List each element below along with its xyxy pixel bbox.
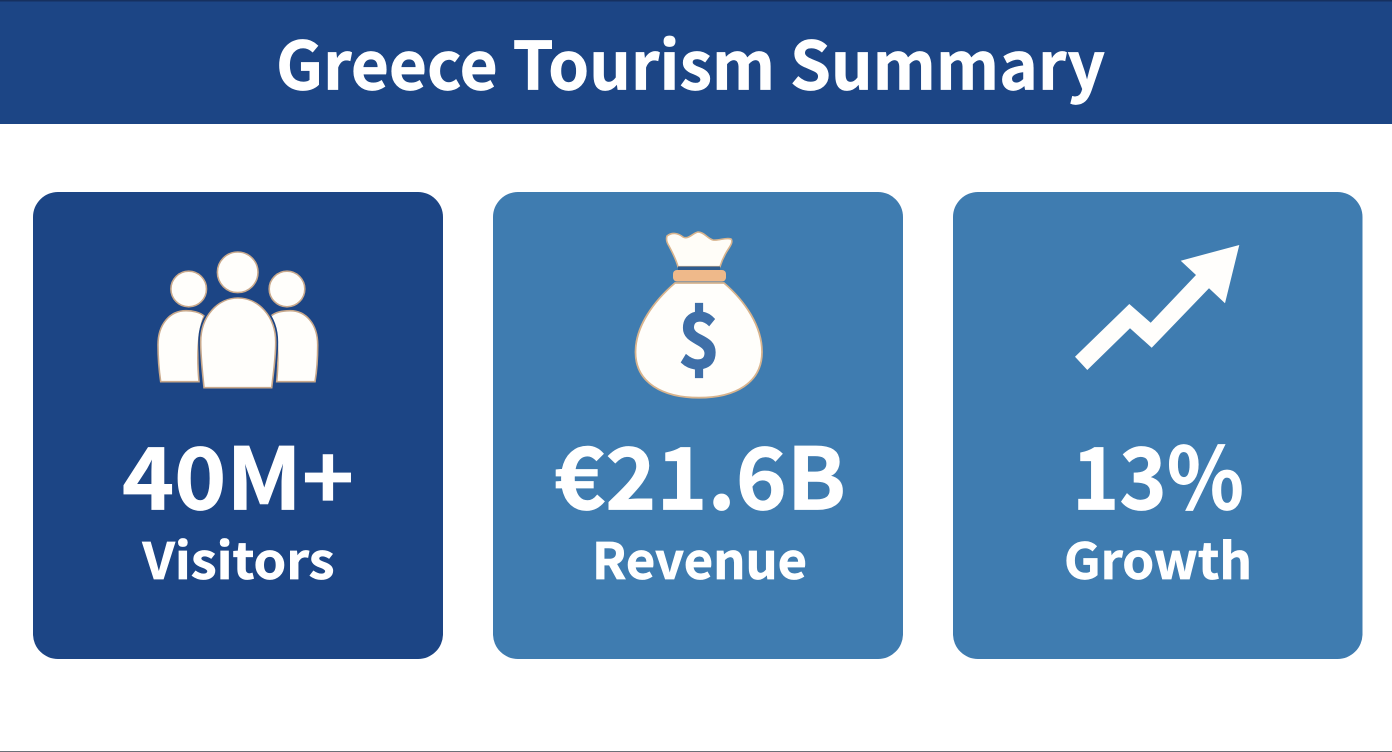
value: €21.6B: €21.6B bbox=[554, 410, 846, 534]
panel: growth bbox=[953, 192, 1362, 659]
label: Growth: Growth bbox=[1064, 522, 1252, 594]
panel: visitors bbox=[33, 192, 443, 659]
label: Revenue: Revenue bbox=[592, 522, 807, 594]
icon glyph: dollar: $ bbox=[678, 280, 720, 390]
icon: people group bbox=[158, 252, 318, 388]
icon: rising arrow bbox=[1075, 245, 1239, 370]
header band bbox=[0, 0, 1392, 124]
value: 13%: 13% bbox=[1072, 410, 1244, 534]
icon: money bag bbox=[636, 232, 762, 398]
label: Visitors: Visitors bbox=[141, 522, 334, 594]
value: 40M+: 40M+ bbox=[122, 410, 354, 534]
panel: revenue bbox=[493, 192, 903, 659]
title: Greece Tourism Summary bbox=[276, 14, 1105, 110]
